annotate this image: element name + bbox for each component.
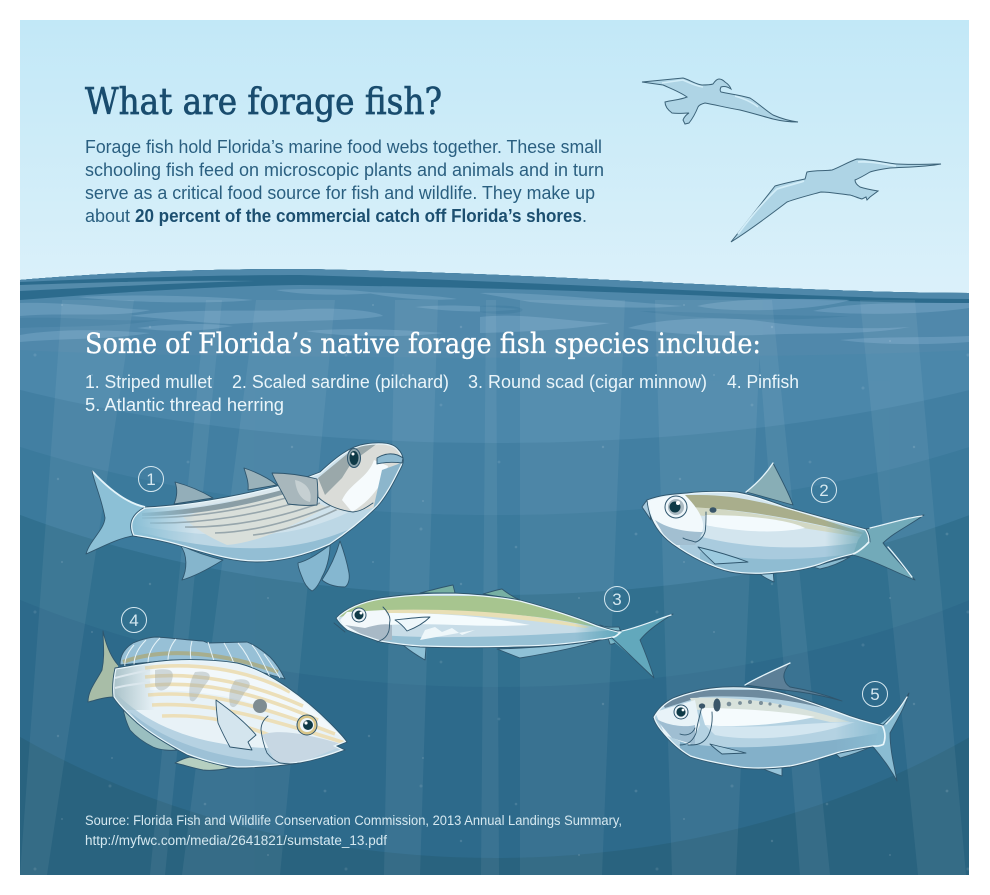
heading: species: Some of Florida’s native forage fish species include: <box>85 327 761 360</box>
label: number 1 <box>138 466 164 492</box>
species list: 4. Pinfish <box>727 372 799 392</box>
text block: introduction <box>85 137 604 226</box>
text block: introduction: schooling fish feed on microscopic plants and animals and in turn <box>85 160 604 180</box>
species list <box>85 372 799 415</box>
fish 5: Atlantic thread herring <box>653 663 909 781</box>
text block: introduction: 20 percent of the commercial catch off Florida’s shores <box>135 206 582 226</box>
text block: introduction: Forage fish hold Florida’s marine food webs together. These small <box>85 137 602 157</box>
source note: Source: Florida Fish and Wildlife Conservation Commission, 2013 Annual Landings Summary, <box>85 813 622 828</box>
label: number 2: 2 <box>819 481 829 500</box>
label: number 4: 4 <box>129 611 139 630</box>
label: number 1: 1 <box>146 470 156 489</box>
fish 4: pinfish <box>88 631 350 772</box>
fish 1: striped mullet <box>86 443 404 591</box>
fish 2: scaled sardine <box>642 463 924 582</box>
fish 3: round scad <box>334 585 673 678</box>
label: number 5 <box>862 682 888 706</box>
species list: 1. Striped mullet <box>85 372 212 392</box>
text block: introduction: . <box>582 206 587 226</box>
species list: 3. Round scad (cigar minnow) <box>468 372 707 392</box>
label: number 4 <box>122 608 146 632</box>
label: number 2 <box>812 478 836 502</box>
label: number 3: 3 <box>612 590 622 609</box>
label: number 3 <box>604 586 630 612</box>
panel: sky background <box>20 20 969 305</box>
text block: introduction: about <box>85 206 130 226</box>
source note: http://myfwc.com/media/2641821/sumstate_13.pdf <box>85 833 387 848</box>
label: number 5: 5 <box>870 685 880 704</box>
wave patches <box>20 289 969 344</box>
icon: seabird lower <box>731 159 941 242</box>
panel: ocean <box>20 269 969 875</box>
title: What are forage fish? <box>85 82 442 123</box>
text block: introduction: serve as a critical food source for fish and wildlife. They make up <box>85 183 595 203</box>
decorative light rays <box>20 300 966 875</box>
icon: seabird upper <box>642 78 798 124</box>
source note <box>85 813 622 848</box>
species list: 5. Atlantic thread herring <box>85 395 284 415</box>
species list: 2. Scaled sardine (pilchard) <box>232 372 449 392</box>
